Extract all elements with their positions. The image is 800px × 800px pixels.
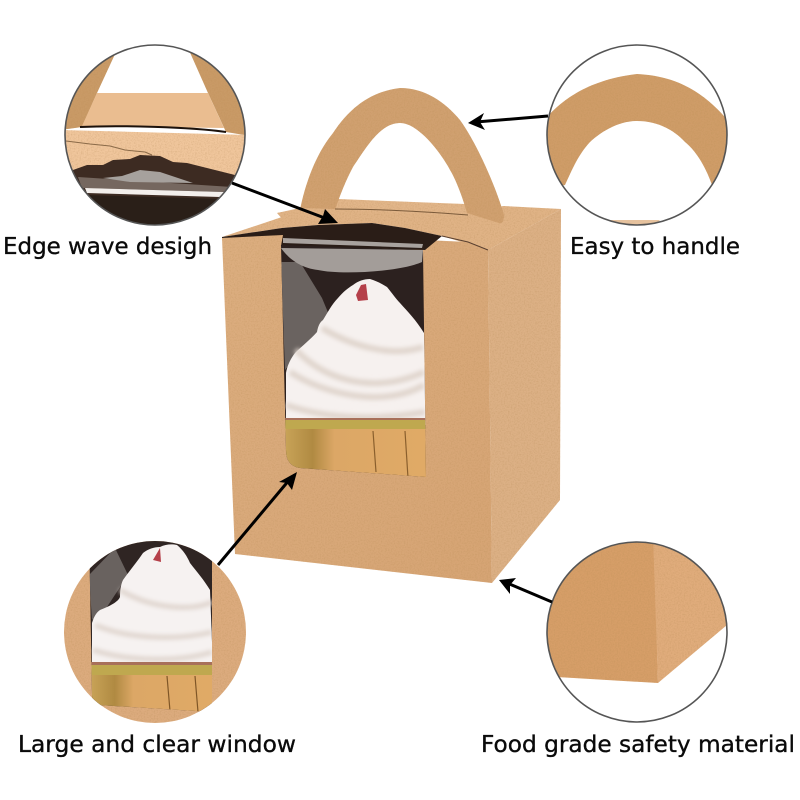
crumb line <box>284 418 428 421</box>
arrow: edge wave <box>232 183 338 224</box>
arrow: window <box>218 472 297 565</box>
edge circle crack line <box>66 141 152 155</box>
lid slit line <box>335 209 468 215</box>
box right face <box>488 209 561 583</box>
box product <box>222 88 561 583</box>
left lid tongue over handle <box>277 208 345 222</box>
frosting swirl shading <box>286 328 425 417</box>
label: food grade: Food grade safety material <box>481 730 795 758</box>
window with cupcake <box>281 245 426 477</box>
edge circle front flap <box>66 130 244 175</box>
edge circle lower dark <box>89 195 217 224</box>
red sprinkles <box>356 284 368 301</box>
window circle sprinkle <box>153 548 161 562</box>
box handle <box>300 88 504 223</box>
window circle grey reflection <box>89 548 128 620</box>
window circle dark interior <box>90 541 212 712</box>
label: edge wave: Edge wave desigh <box>3 232 212 260</box>
edge circle back panel <box>82 93 224 128</box>
window circle kraft background <box>64 541 246 723</box>
edge circle dark window <box>73 155 235 199</box>
window dark interior <box>281 245 426 477</box>
window circle crumb line <box>90 662 214 665</box>
detail circle: handle <box>540 45 735 230</box>
gold band <box>284 420 428 430</box>
edge circle white band <box>85 188 224 197</box>
arrow: material <box>499 578 552 602</box>
window circle gold band <box>90 665 214 675</box>
glass highlight <box>283 238 423 248</box>
corner left face <box>548 542 658 683</box>
edge circle slit <box>80 126 226 132</box>
handle arch close-up <box>548 74 726 186</box>
box back panel <box>330 199 475 218</box>
gold cup <box>284 429 428 480</box>
frosting <box>286 279 427 425</box>
edge circle grey band <box>78 177 232 192</box>
window glass reflection <box>281 248 423 272</box>
window grey reflection <box>281 262 332 370</box>
edge circle handle straps <box>66 53 244 135</box>
corner circle outline <box>547 542 727 722</box>
window circle gold cup <box>92 675 212 712</box>
edge circle glass reflection <box>103 170 193 183</box>
box corner sliver <box>610 220 660 224</box>
handle circle outline <box>547 45 727 225</box>
window circle swirls <box>93 590 212 659</box>
wave dark opening <box>222 223 442 250</box>
corner right face <box>654 544 726 683</box>
box front face <box>222 232 492 583</box>
lid flap right edge <box>442 236 488 250</box>
detail circle: window <box>64 541 246 723</box>
window circle frosting <box>92 544 213 668</box>
arrow: handle <box>468 113 548 130</box>
label: easy to handle: Easy to handle <box>570 232 740 260</box>
box top lid <box>222 206 561 250</box>
detail circle: edge wave <box>60 40 250 230</box>
edge circle outline <box>65 45 245 225</box>
detail circle: material corner <box>540 535 735 722</box>
label: large window: Large and clear window <box>18 730 296 758</box>
